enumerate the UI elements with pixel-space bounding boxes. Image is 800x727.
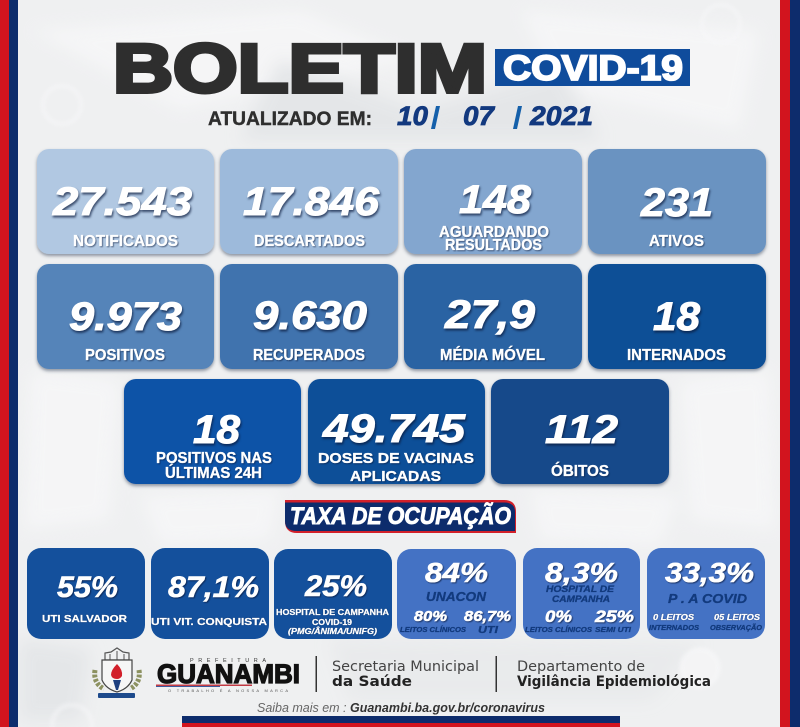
card: notificados: NOTIFICADOS [73,233,178,250]
card: media movel: MÉDIA MÓVEL [440,345,545,364]
card: aguardando resultados [404,149,582,254]
card: positivos [37,264,214,369]
card: hospital de campanha: 25% [594,607,634,626]
update date line: 07 [463,101,496,131]
card: recuperados [220,264,398,369]
card: positivos nas ultimas 24h: 18 [193,408,241,452]
update date line [208,101,593,131]
card: media movel: 27,9 [444,293,536,337]
card: p.a covid: P . A COVID [668,591,748,606]
card: uti vit. conquista [151,548,269,639]
card: doses de vacinas aplicadas [308,379,485,485]
card: hospital de campanha: 8,3% [545,557,618,588]
card: notificados [37,149,214,254]
right border stripes [780,0,800,727]
card: unacon: 86,7% [464,608,511,625]
left border stripes [0,0,18,727]
card: obitos: 112 [545,408,618,452]
text: website: Saiba mais em : Guanambi.ba.gov.br/coronavirus [257,700,545,715]
card: hospital de campanha: 0% [545,607,572,626]
card: positivos nas ultimas 24h: ÚLTIMAS 24H [165,463,262,482]
card: aguardando resultados: RESULTADOS [445,237,542,254]
text: secretaria municipal da saude [332,659,479,690]
card: unacon: UTI [478,625,498,636]
card: doses de vacinas aplicadas: 49.745 [322,407,466,451]
card: notificados: 27.543 [52,180,192,224]
text: departamento de vigilancia epidemiologica: Vigilância Epidemiológica [517,674,711,690]
card: p.a covid: 05 LEITOS [714,613,761,622]
card: unacon: 80% [414,608,447,625]
card: unacon: UNACON [426,589,487,604]
card: hospital de campanha covid-19 [274,549,392,639]
card: hospital de campanha: CAMPANHA [552,594,610,605]
card: unacon [397,549,516,639]
card: unacon: 84% [425,557,488,588]
card: aguardando resultados: AGUARDANDO [439,224,549,241]
card: doses de vacinas aplicadas: DOSES DE VACINAS [318,450,474,467]
card: descartados [220,149,398,254]
card: positivos: 9.973 [69,295,182,339]
card: unacon: LEITOS CLÍNICOS [400,625,466,634]
card: hospital de campanha: LEITOS CLÍNICOS [525,625,592,634]
icon: guanambi coat of arms [95,648,139,698]
card: ativos: 231 [640,181,713,225]
card: p.a covid: 0 LEITOS [653,613,695,622]
update date line: 10 [397,101,428,131]
card: uti salvador: UTI SALVADOR [42,613,127,625]
card: positivos nas ultimas 24h: POSITIVOS NAS [156,450,272,467]
card: descartados: DESCARTADOS [254,233,365,250]
card: p.a covid: 33,3% [665,557,754,588]
card: hospital de campanha [523,548,640,639]
card: positivos: POSITIVOS [85,347,165,364]
card: hospital de campanha: HOSPITAL DE [546,584,615,595]
card: recuperados: RECUPERADOS [253,347,365,364]
card: uti vit. conquista: UTI VIT. CONQUISTA [151,616,267,628]
text: secretaria municipal da saude: Secretaria Municipal [332,659,479,675]
card: descartados: 17.846 [243,180,380,224]
card: obitos: ÓBITOS [551,461,609,480]
logo: prefeitura guanambi: O TRABALHO É A NOSSA MARCA [168,688,288,693]
logo: prefeitura guanambi: GUANAMBI [157,659,300,689]
text: secretaria municipal da saude: da Saúde [332,674,412,690]
bottom bar [182,716,620,727]
title: BOLETIM: BOLETIM [113,30,487,107]
card: uti vit. conquista: 87,1% [168,571,259,604]
card: recuperados: 9.630 [253,294,367,338]
text: departamento de vigilancia epidemiologica [517,659,711,690]
card: media movel [404,264,582,369]
card: p.a covid [647,548,765,639]
divider 2 [496,656,497,692]
card: ativos [588,149,766,254]
card: hospital de campanha covid-19: HOSPITAL DE CAMPANHA [276,608,389,617]
card: doses de vacinas aplicadas: APLICADAS [350,468,441,485]
card: internados: INTERNADOS [627,347,726,364]
card: obitos [491,379,669,484]
card: p.a covid: INTERNADOS [649,623,699,632]
heading banner: taxa de ocupacao: TAXA DE OCUPAÇÃO [290,502,511,530]
card: aguardando resultados: 148 [459,178,532,222]
card: positivos nas ultimas 24h [124,379,301,484]
card: hospital de campanha covid-19: (PMG/ÂNIMA/UNIFG) [288,627,377,636]
logo: prefeitura guanambi: PREFEITURA [190,658,266,664]
divider 1 [316,656,317,692]
card: internados [588,264,766,369]
card: hospital de campanha covid-19: COVID-19 [312,618,353,627]
update date line: 2021 [529,101,593,131]
card: uti salvador [27,548,145,639]
card: hospital de campanha covid-19: 25% [304,570,367,603]
card: hospital de campanha: SEMI UTI [595,625,632,634]
title badge: COVID-19: COVID-19 [503,49,683,88]
update date line: ATUALIZADO EM: [208,109,372,130]
card: p.a covid: OBSERVAÇÃO [710,623,762,632]
card: ativos: ATIVOS [649,233,704,250]
text: departamento de vigilancia epidemiologica: Departamento de [517,659,645,675]
card: uti salvador: 55% [57,571,118,604]
card: internados: 18 [653,295,701,339]
